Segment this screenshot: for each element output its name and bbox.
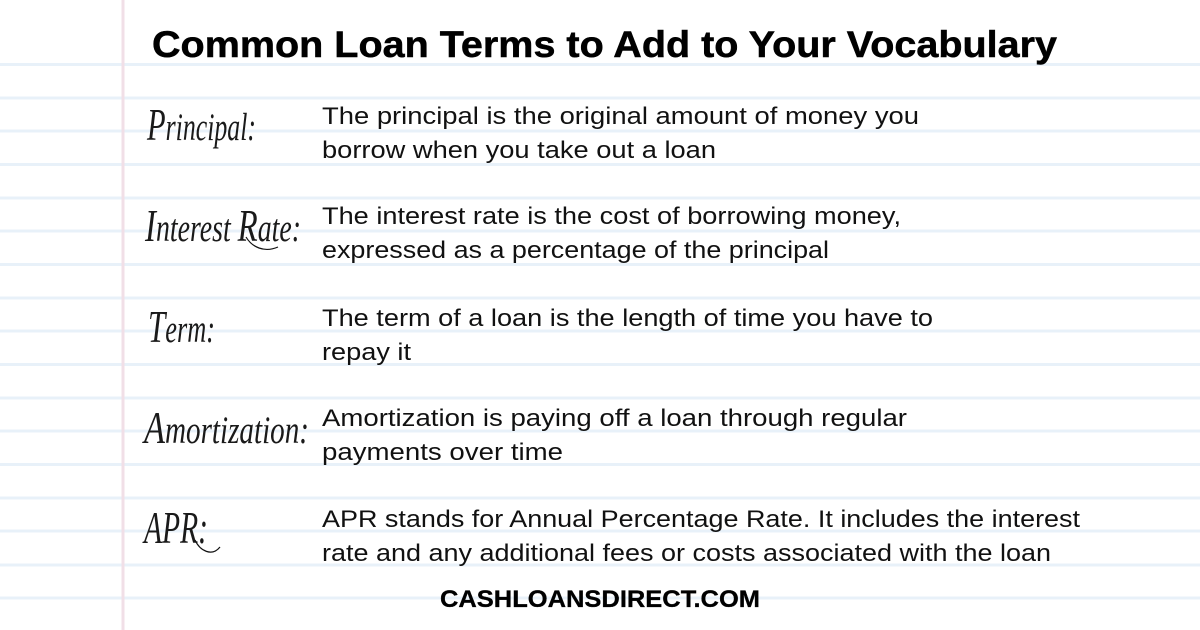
definition: amortization: payments over time (322, 439, 563, 466)
entry: apr (142, 502, 1080, 567)
definition: term: The term of a loan is the length of time you have to (322, 305, 933, 332)
definition: interest rate (322, 203, 901, 264)
footer url: CASHLOANSDIRECT.COM (440, 586, 760, 613)
term: principal: Principal: (146, 99, 256, 150)
title: Common Loan Terms to Add to Your Vocabulary (152, 24, 1057, 65)
definition: principal: borrow when you take out a loan (322, 137, 716, 164)
entry: interest rate (144, 200, 901, 264)
definition: amortization (322, 405, 907, 466)
term: amortization: Amortization: (142, 402, 309, 453)
entry: amortization (142, 402, 907, 466)
definition: apr: APR stands for Annual Percentage Rate. It includes the interest (322, 506, 1080, 533)
definition: interest rate: expressed as a percentage of the principal (322, 237, 829, 264)
definition: amortization: Amortization is paying off a loan through regular (322, 405, 907, 432)
term: interest rate: Interest Rate: (144, 200, 301, 251)
entry: principal (146, 99, 919, 164)
definition: interest rate: The interest rate is the cost of borrowing money, (322, 203, 901, 230)
term: apr: APR: (142, 502, 208, 553)
definition: term: repay it (322, 339, 411, 366)
definition: principal (322, 103, 919, 164)
entry: term (148, 301, 933, 366)
definition: term (322, 305, 933, 366)
definition: apr: rate and any additional fees or costs associated with the loan (322, 540, 1051, 567)
term: term: Term: (148, 301, 215, 352)
definition: principal: The principal is the original amount of money you (322, 103, 919, 130)
definition: apr (322, 506, 1080, 567)
